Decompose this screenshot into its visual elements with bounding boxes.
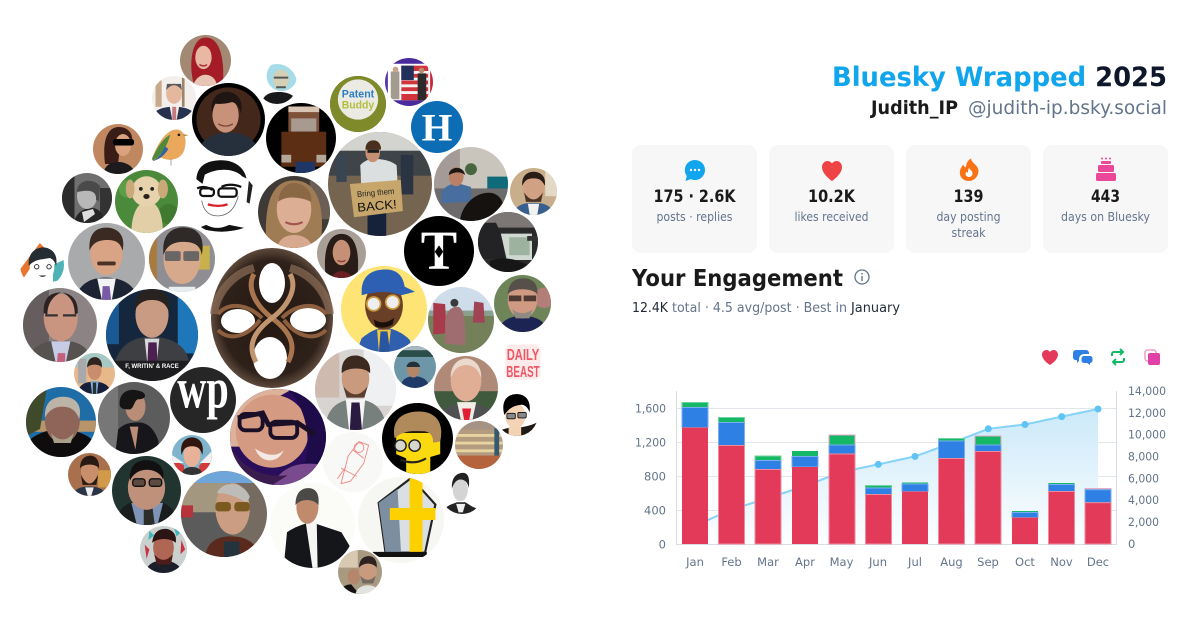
label: days on Bluesky (1061, 210, 1150, 224)
month labels: Dec (1087, 555, 1109, 569)
month labels: Sep (977, 555, 999, 569)
legend icons (1042, 349, 1160, 365)
avatar: line-drawn face (196, 160, 253, 232)
avatar: Patent Buddy logo: Buddy (342, 99, 374, 111)
avatar: man with glasses and beard (494, 275, 551, 332)
avatar: red line sketch (323, 432, 383, 492)
month labels: Jul (907, 555, 922, 569)
left axis labels (635, 402, 666, 552)
avatar: balding man with glasses (23, 288, 97, 362)
left axis labels: 1,200 (635, 436, 666, 450)
avatar: cartoon man in UVA hat (341, 266, 427, 352)
bars: Oct (1012, 511, 1038, 544)
avatar: woman selfie (258, 176, 330, 248)
avatar: flag photo (385, 58, 433, 106)
bars: Aug (938, 438, 964, 544)
bars: Feb (718, 418, 744, 544)
avatar: man with glasses (149, 226, 215, 292)
avatar: bald man with red tie (434, 356, 498, 420)
avatar: heavyset man with glasses (112, 456, 181, 525)
avatar: bearded man with brick wall (68, 453, 111, 496)
icon: heart (822, 161, 842, 181)
month labels: Jan (685, 555, 704, 569)
avatar: man in black blazer (270, 483, 355, 568)
icon: flame (960, 158, 978, 181)
month labels: Mar (757, 555, 779, 569)
avatar: minecraft character (266, 103, 336, 173)
month labels (685, 555, 1109, 569)
avatar: man in navy suit (152, 76, 196, 120)
engagement summary (632, 300, 900, 316)
label: likes received (794, 210, 868, 224)
bars: Jan (682, 402, 708, 544)
cumulative line (695, 409, 1098, 526)
avatar: two men selfie (338, 550, 382, 594)
avatar: Hartford H logo: H (422, 106, 453, 150)
avatar: bishop's mitre (358, 477, 444, 563)
avatar: Hartford H logo (411, 101, 463, 153)
right axis labels (1128, 384, 1166, 551)
avatar: black and white illustration (441, 472, 483, 514)
avatar: protester with sign: Bring them (357, 186, 395, 199)
avatar: smiling man with purple tint (230, 389, 326, 485)
avatar: golden retriever puppy (115, 170, 178, 233)
bars: Mar (755, 456, 781, 544)
icon: replies (1073, 350, 1092, 365)
avatar: man on couch with dog (434, 147, 508, 221)
stat card: streak (906, 145, 1031, 253)
avatar: orange bird (152, 130, 188, 166)
month labels: Apr (795, 555, 815, 569)
avatar: TV news man (106, 289, 198, 381)
bars: May (829, 435, 855, 544)
display name: Judith_IP (869, 97, 958, 119)
bars: Sep (975, 436, 1001, 544)
avatar: cartoon with orange stripes (20, 243, 64, 282)
stacked bars (682, 402, 1111, 544)
bars: Apr (792, 451, 818, 544)
avatar: Washington Post logo (170, 367, 236, 433)
avatar: man in front of capitol (74, 353, 115, 394)
right axis labels: 2,000 (1128, 515, 1159, 529)
avatar: man by river (394, 346, 436, 388)
icon: chat bubble (685, 160, 705, 181)
icon: reposts (1112, 349, 1124, 365)
right axis labels: 6,000 (1128, 472, 1159, 486)
stat card: posts and replies (632, 145, 757, 253)
left axis labels: 800 (644, 470, 666, 484)
avatar: red-haired woman (180, 35, 231, 86)
right axis labels: 4,000 (1128, 493, 1159, 507)
month labels: Nov (1050, 555, 1073, 569)
month labels: Feb (721, 555, 742, 569)
grid lines (677, 408, 1116, 510)
left axis labels: 1,600 (635, 402, 666, 416)
left axis labels: 0 (659, 538, 666, 552)
avatar: Daily Beast logo (501, 340, 545, 384)
value: 139 (954, 187, 984, 207)
month labels: Oct (1015, 555, 1035, 569)
icon: info (855, 270, 869, 284)
label second line: streak (952, 226, 986, 240)
label: day posting (936, 210, 1000, 224)
right axis labels: 10,000 (1128, 428, 1166, 442)
avatar: Patent Buddy logo: Patent (342, 88, 375, 100)
right axis labels: 0 (1128, 537, 1135, 551)
avatar: woman with dark hair (317, 229, 366, 278)
heading: Your Engagement: Your Engagement (631, 266, 843, 292)
bars: Jun (866, 486, 892, 544)
avatar: woman with flag background (172, 435, 212, 475)
avatar: older man selfie (26, 387, 96, 457)
axes (676, 391, 1116, 544)
avatar: cartoon with black hair and shades (496, 394, 538, 436)
avatar: smiling bearded man (510, 168, 557, 215)
right axis labels: 14,000 (1128, 384, 1166, 398)
avatar: New York Times logo (404, 216, 474, 286)
title: Bluesky Wrapped 2025 (832, 62, 1167, 93)
value: 175 · 2.6K (654, 187, 736, 207)
avatar: protester with sign: BACK! (357, 197, 397, 215)
avatar: Patent Buddy logo (330, 76, 386, 132)
chart: monthly engagement stacked bars and cumulative line (635, 384, 1166, 569)
avatar: bronze sculpture coin (210, 248, 334, 388)
month labels: May (830, 555, 854, 569)
avatar: people in field (428, 287, 494, 353)
avatar: sunglasses woman (93, 124, 143, 174)
avatar cloud (20, 35, 557, 594)
right axis labels: 12,000 (1128, 406, 1166, 420)
handle: @judith-ip.bsky.social (968, 97, 1167, 119)
engagement summary: total · 4.5 avg/post · Best in (672, 300, 847, 316)
month labels: Jun (868, 555, 887, 569)
value: 443 (1091, 187, 1120, 207)
avatar: protester with sign (328, 132, 432, 236)
icon: quotes (1145, 350, 1160, 365)
stat card: days on Bluesky (1043, 145, 1168, 253)
avatar: man with black ring (192, 83, 265, 156)
engagement summary: 12.4K (632, 300, 669, 316)
label: posts · replies (656, 210, 732, 224)
bars: Nov (1048, 483, 1074, 544)
avatar: man in orange sunglasses on street (181, 471, 267, 557)
left axis labels: 400 (644, 504, 666, 518)
right axis labels: 8,000 (1128, 450, 1159, 464)
avatar: anaglyph portrait (140, 526, 187, 573)
line markers (875, 406, 1102, 468)
icon: cake (1096, 158, 1116, 181)
avatar: man in grey suit (315, 349, 396, 430)
value: 10.2K (808, 187, 856, 207)
avatar: man with moustache (68, 223, 145, 300)
cumulative area (695, 409, 1098, 544)
avatar: woman in profile (98, 382, 170, 454)
avatar: New York Times logo: T (421, 220, 457, 281)
avatar: TV news man: F, WRITIN' & RACE (125, 364, 179, 370)
avatar: Simpsons-style character (382, 403, 453, 474)
month labels: Aug (940, 555, 963, 569)
bars: Dec (1085, 488, 1111, 544)
avatar: black and white man (62, 173, 112, 223)
icon: likes (1042, 350, 1058, 365)
stat card: likes (769, 145, 894, 253)
avatar: car interior (478, 212, 538, 272)
engagement summary: January (850, 300, 900, 316)
bars: Jul (902, 482, 928, 544)
avatar: newsroom building (455, 421, 503, 469)
avatar: sketched man on blue (263, 64, 296, 104)
